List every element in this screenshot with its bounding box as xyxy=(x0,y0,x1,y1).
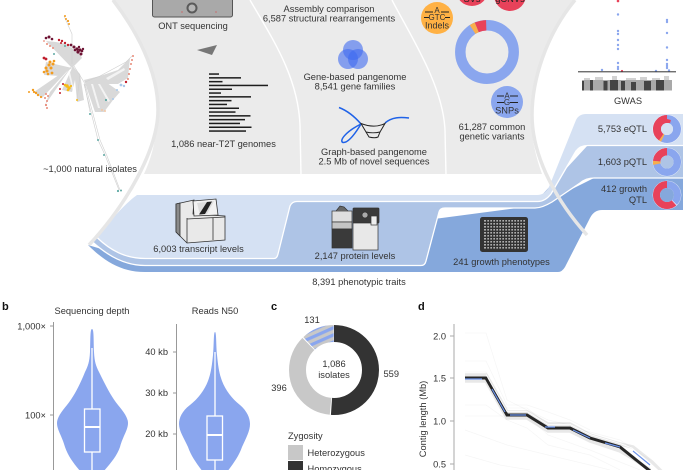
text: contig axis labels: 1.5 xyxy=(433,374,446,384)
icon: indels badge: GTC xyxy=(429,13,446,22)
text: growth QTL: 412 growth xyxy=(601,184,647,194)
panel b label: b xyxy=(2,301,9,313)
icon: gCNVs badge xyxy=(494,0,526,11)
legend: zygosity: Zygosity xyxy=(288,431,323,441)
icon: transcript sequencing instrument xyxy=(176,199,225,243)
text: contig axis labels: 2.0 xyxy=(433,332,446,342)
heading: reads N50: Reads N50 xyxy=(192,306,238,316)
text: donut labels: 396 xyxy=(271,383,287,393)
icon: growth plate xyxy=(480,217,528,252)
text: N50 axis labels: 30 kb xyxy=(145,388,168,398)
band: transcript levels xyxy=(97,114,683,258)
text: donut labels: 1,086 xyxy=(322,359,346,369)
icon: genome bars xyxy=(209,73,268,132)
icon: SNPs badge: SNPs xyxy=(495,106,519,116)
text: growth QTL: QTL xyxy=(629,195,647,205)
panel: genome assembly analyses xyxy=(112,0,575,175)
chart: zygosity donut xyxy=(298,334,370,406)
text: gene-based pangenome: Gene-based pangenome xyxy=(304,72,406,82)
chart: pQTL donut xyxy=(653,148,681,176)
text: N50 axis labels xyxy=(145,347,168,439)
text: transcript levels: 6,003 transcript levels xyxy=(153,244,244,254)
text: near-T2T genomes: 1,086 near-T2T genomes xyxy=(171,139,276,149)
text: assembly comparison: Assembly comparison xyxy=(284,4,374,14)
text: contig axis labels xyxy=(418,332,446,470)
icon: ONT sequencer xyxy=(152,0,232,17)
text: eQTL: 5,753 eQTL xyxy=(598,124,647,134)
text: N50 axis labels: 20 kb xyxy=(145,429,168,439)
blue flow bands xyxy=(88,114,683,272)
text: ONT sequencing: ONT sequencing xyxy=(158,21,228,31)
text: depth axis labels: 100× xyxy=(25,410,46,420)
text: contig axis labels: 0.5 xyxy=(433,460,446,470)
icon: SNPs badge: A xyxy=(504,92,510,100)
text: contig axis labels: 1.0 xyxy=(433,416,446,426)
text: protein levels: 2,147 protein levels xyxy=(315,251,396,261)
chart: variant donut xyxy=(460,25,514,79)
text: donut labels: 559 xyxy=(384,369,399,379)
chart: reads N50 violin xyxy=(173,324,250,470)
text: gene-based pangenome: 8,541 gene families xyxy=(315,82,396,92)
text: pQTL: 1,603 pQTL xyxy=(598,157,647,167)
text: graph-based pangenome: 2.5 Mb of novel sequences xyxy=(318,157,430,167)
text: phenotypic traits: 8,391 phenotypic traits xyxy=(312,277,406,287)
text: natural isolates: ~1,000 natural isolates xyxy=(43,164,137,174)
text: contig axis labels: Contig length (Mb) xyxy=(418,381,428,457)
text: assembly comparison: 6,587 structural rearrangements xyxy=(263,14,395,24)
phylogenetic tree of natural isolates xyxy=(28,15,134,192)
chart: GWAS Manhattan plot xyxy=(578,0,676,91)
text: N50 axis labels: 40 kb xyxy=(145,347,168,357)
panel d label: d xyxy=(418,301,425,313)
chart: contig length lines xyxy=(450,324,664,470)
text: donut labels: 131 xyxy=(304,315,320,325)
text: GWAS: GWAS xyxy=(614,96,642,106)
gray arc boundaries xyxy=(89,0,587,245)
icon: indels badge: Indels xyxy=(425,20,450,30)
band: growth phenotypes xyxy=(88,178,683,272)
text: depth axis labels xyxy=(17,322,46,420)
text: common genetic variants: 61,287 common xyxy=(459,122,525,132)
legend: zygosity xyxy=(288,431,365,470)
panel c label: c xyxy=(271,301,277,313)
icon: SVs badge xyxy=(456,0,488,6)
chart: eQTL donut xyxy=(653,115,681,143)
text: growth phenotypes: 241 growth phenotypes xyxy=(453,257,550,267)
icon: gene Venn diagram xyxy=(338,40,368,69)
icon: SNPs badge xyxy=(491,86,523,118)
icon: SNPs badge: G xyxy=(504,98,510,107)
text: common genetic variants: genetic variants xyxy=(459,132,525,142)
heading: sequencing depth: Sequencing depth xyxy=(55,306,129,316)
text: graph-based pangenome: Graph-based pangenome xyxy=(321,147,427,157)
text: donut labels xyxy=(271,315,399,393)
icon: pangenome graph xyxy=(339,108,409,143)
chart: sequencing depth violin xyxy=(50,322,128,470)
icon: arrow xyxy=(197,45,217,55)
band: protein levels xyxy=(92,145,683,266)
icon: protein mass spectrometry instrument xyxy=(332,206,379,250)
icon: indels badge: A xyxy=(434,6,440,15)
text: donut labels: isolates xyxy=(318,370,350,380)
icon: indels badge xyxy=(421,2,453,34)
text: depth axis labels: 1,000× xyxy=(17,322,46,332)
chart: growth QTL donut xyxy=(653,181,681,209)
legend: zygosity: Heterozygous xyxy=(308,448,365,458)
